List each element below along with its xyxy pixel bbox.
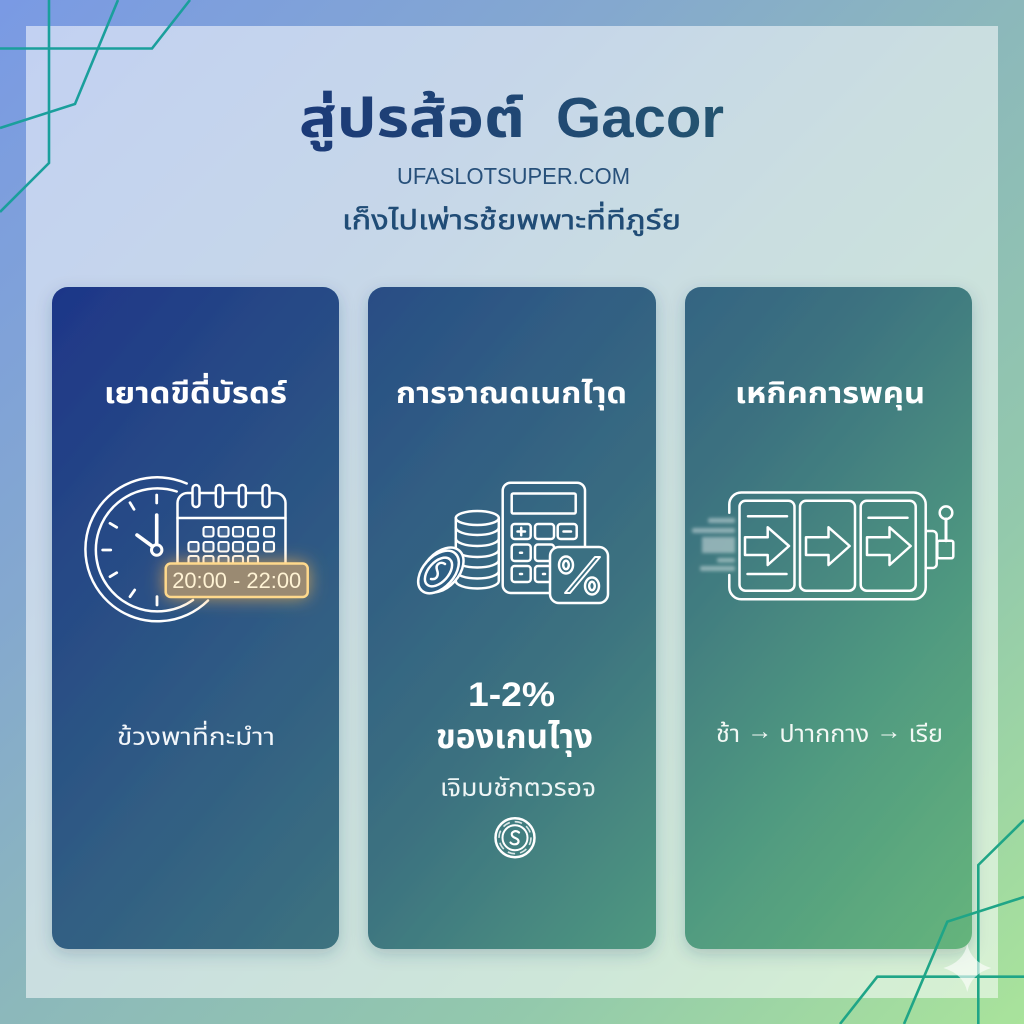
card background 1: [52, 287, 339, 949]
title: สู่ปรส้อต์: [299, 89, 525, 151]
icon: casino chip: [496, 818, 534, 857]
card 3 caption: →: [747, 718, 772, 745]
icon: calendar: [178, 485, 286, 566]
icon: tilted coin: [410, 539, 472, 601]
percent figure: 1-2%: [468, 676, 555, 714]
motion blur streaks: [692, 518, 735, 571]
card 1 caption: ข้วงพาที่กะมำา: [117, 720, 275, 751]
title: [299, 86, 724, 151]
tagline: เก็งไปเพ่ารช้ยพพาะที่ทีภูร์ย: [342, 201, 681, 236]
card 3 heading: เหกิคการพคุน: [735, 378, 925, 410]
panel: money management: [368, 287, 656, 949]
card 2 heading: การจาณดเนกไาุด: [396, 378, 627, 410]
decorative lines: top-left corner: [0, 0, 190, 212]
card 3 caption: →: [876, 718, 901, 745]
panel: timing: [52, 287, 339, 949]
icon: coin stack: [456, 511, 499, 588]
icon: clock: [85, 477, 208, 621]
card background 2: [368, 287, 656, 949]
panel: spin technique: [685, 287, 972, 949]
percent label: ของเกนไาุง: [436, 718, 593, 757]
icon: calculator: [503, 483, 585, 593]
card background 3: [685, 287, 972, 949]
card 3 caption: ปาากกาง: [772, 721, 876, 748]
subtitle: website: UFASLOTSUPER.COM: [397, 163, 630, 189]
time badge: [166, 564, 308, 597]
sparkle: [943, 944, 991, 992]
title: Gacor: [556, 86, 724, 150]
decorative lines: bottom-right corner: [840, 820, 1024, 1024]
card 1 heading: เยาดขีดี่บัรดร์: [104, 372, 287, 410]
card 2 caption: เจิมบชักตวรอจ: [440, 774, 596, 802]
time badge: 20:00 - 22:00: [172, 568, 301, 593]
icon: slot machine: [729, 492, 953, 599]
card 3 caption: ช้า: [716, 721, 739, 748]
card 3 caption: เรีย: [901, 721, 943, 748]
icon: percent tile: [550, 547, 608, 603]
